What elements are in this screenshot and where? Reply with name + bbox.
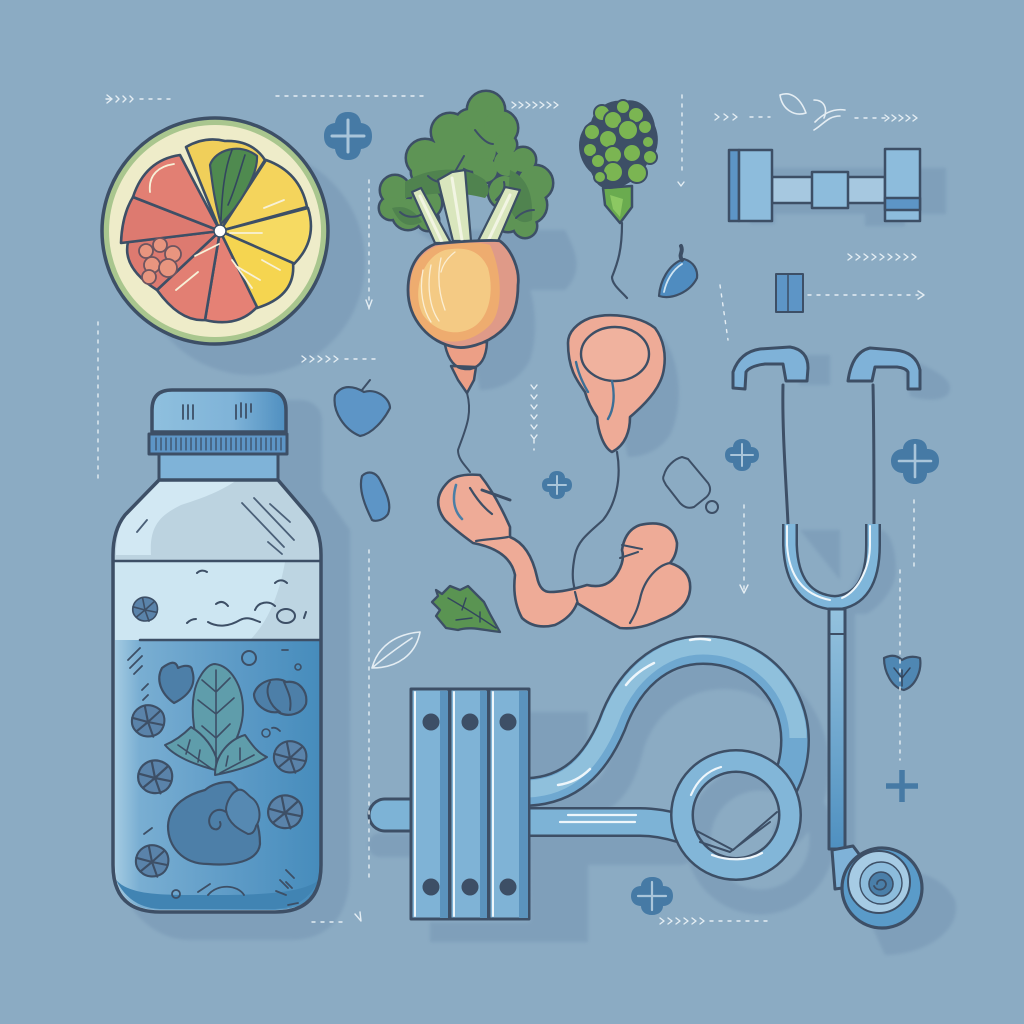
bottle bean	[254, 679, 306, 715]
plus: simple	[886, 770, 918, 802]
hose lower	[528, 822, 682, 829]
icon: small blue heart fruit	[335, 380, 390, 436]
icon: pill tag outline	[663, 457, 718, 513]
left earpiece	[733, 347, 808, 389]
chestpiece	[832, 846, 862, 889]
citrus leaf	[210, 149, 257, 224]
plus badge: centre	[542, 471, 572, 499]
icon: stomach	[568, 315, 665, 590]
icon: small blue pepper	[659, 246, 697, 297]
bottle cap	[152, 390, 286, 432]
hose upper	[528, 650, 795, 792]
plus badge: right small	[725, 439, 759, 471]
bottle leaves	[165, 664, 267, 775]
icon: plus badge top	[324, 112, 372, 160]
icon: small door shape	[776, 274, 803, 312]
rivets	[423, 714, 516, 895]
icon: outlined leaf	[372, 632, 420, 668]
bottle collar	[149, 434, 287, 454]
broccoli stems	[412, 170, 520, 243]
hose loop	[682, 761, 790, 869]
citrus highlights	[150, 164, 284, 290]
beet bulb	[408, 240, 518, 347]
soft shadows	[132, 149, 956, 955]
chevron runs	[106, 95, 924, 924]
bottle rosettes	[132, 597, 306, 877]
icon: root vegetable	[380, 92, 552, 472]
bottle heart	[159, 663, 193, 703]
icon: small leaf right	[884, 656, 920, 690]
plate shading	[440, 691, 528, 918]
bottle big blob	[168, 782, 260, 864]
bottle light band	[115, 562, 320, 640]
icon: water bottle	[113, 390, 321, 912]
icon: barbell plates with hose	[385, 639, 798, 919]
icon: citrus slice	[102, 118, 328, 344]
stem	[829, 609, 845, 849]
icon: outlined sprig	[780, 94, 845, 130]
icon: dumbbell	[729, 149, 920, 221]
bottle glare lines	[137, 498, 294, 554]
icon: green grape cluster	[580, 100, 657, 298]
thin tubes	[783, 385, 874, 524]
hose stub	[385, 798, 412, 832]
bottle neck	[159, 450, 278, 482]
icon: intestine	[438, 475, 690, 628]
citrus segments	[121, 139, 311, 322]
yoke	[790, 524, 873, 603]
bottle water	[115, 640, 320, 910]
plus badge: bottom	[631, 877, 673, 915]
broccoli crowns	[380, 92, 552, 237]
citrus pulp cluster	[139, 238, 181, 284]
icon: small blue chip	[361, 473, 389, 521]
dashed guide lines and arrows	[98, 95, 918, 922]
icon: stethoscope	[733, 347, 922, 928]
right earpiece	[848, 348, 920, 389]
beet root line	[458, 393, 470, 472]
beet tail	[445, 342, 487, 393]
plates	[411, 689, 529, 919]
icon: leaf small	[432, 586, 500, 632]
bottle body	[113, 480, 321, 912]
plus badge: right large	[891, 439, 939, 484]
